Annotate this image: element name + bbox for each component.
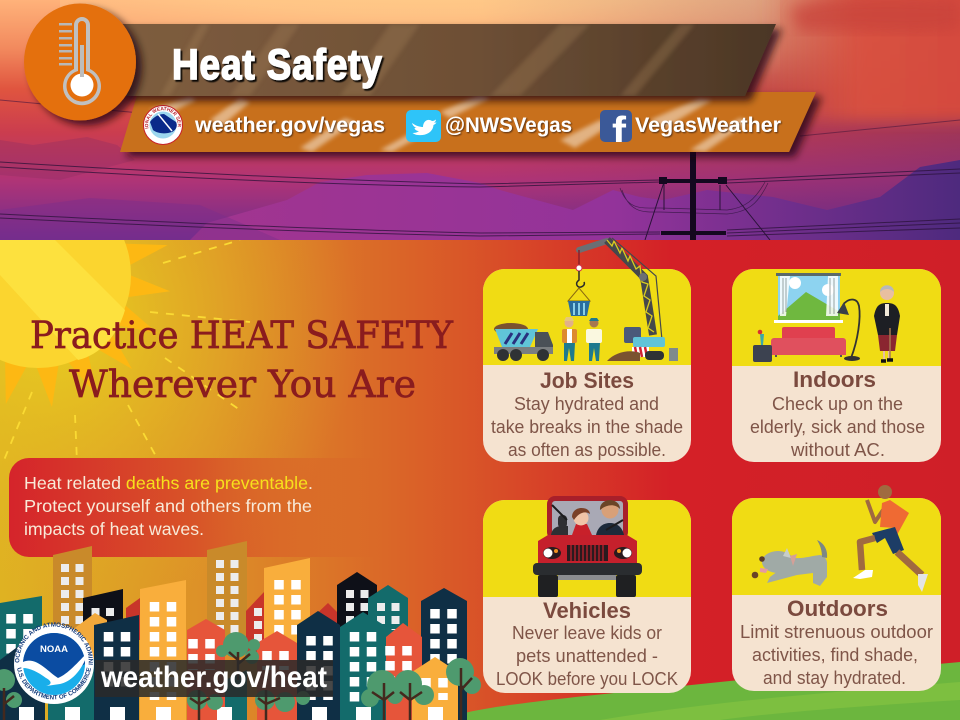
sun [0, 240, 250, 459]
text: Job Sites advice: take breaks in the shade [491, 417, 683, 437]
icon: Facebook [600, 110, 632, 142]
text: Indoors advice [750, 394, 925, 460]
mountains [0, 137, 960, 240]
text: Outdoors advice: and stay hydrated. [763, 668, 906, 688]
icon: NOAA logo: U.S. DEPARTMENT OF COMMERCE [17, 667, 91, 700]
callout: heat deaths are preventable: Protect yourself and others from the [24, 496, 312, 516]
power lines and pylon [0, 100, 960, 240]
panel: Job Sites [483, 238, 691, 462]
panel: lower orange background [0, 240, 960, 720]
panel: Indoors [732, 269, 941, 462]
callout: heat deaths are preventable: Heat related deaths are preventable. [24, 473, 313, 493]
callout: heat deaths are preventable [9, 458, 328, 557]
text: Outdoors advice: activities, find shade, [752, 645, 918, 665]
text: @NWSVegas: @NWSVegas [445, 114, 572, 137]
icon: thermometer in orange circle [24, 4, 136, 120]
banner: web address and social links [120, 91, 826, 163]
band: weather.gov/heat link: weather.gov/heat [100, 661, 327, 694]
text: Indoors advice: elderly, sick and those [750, 417, 925, 437]
panel: Vehicles [483, 496, 691, 693]
grass [440, 662, 960, 720]
heading: Practice HEAT SAFETY Wherever You Are: Practice HEAT SAFETY [30, 314, 454, 357]
heading: Vehicles: Vehicles [543, 598, 631, 623]
callout: heat deaths are preventable: impacts of heat waves. [24, 519, 204, 539]
heading: Indoors: Indoors [793, 367, 876, 392]
text: weather.gov/vegas: weather.gov/vegas [194, 114, 385, 137]
text: Indoors advice: without AC. [790, 440, 885, 460]
city skyline illustration [0, 541, 481, 720]
text: Vehicles advice [496, 623, 678, 689]
text: Outdoors advice [740, 622, 933, 688]
icon: NWS logo [143, 105, 183, 145]
icon: Facebook: f [612, 108, 627, 155]
heading: Job Sites: Job Sites [540, 368, 634, 393]
text: Job Sites advice: Stay hydrated and [514, 394, 659, 414]
text: Vehicles advice: LOOK before you LOCK [496, 669, 678, 689]
illustration: dog and runner [752, 485, 928, 592]
text: VegasWeather: VegasWeather [635, 114, 781, 137]
heading: Outdoors: Outdoors [787, 596, 888, 621]
text: Indoors advice: Check up on the [772, 394, 903, 414]
trees [0, 632, 481, 720]
text: Vehicles advice: Never leave kids or [512, 623, 662, 643]
title: Heat Safety [172, 41, 382, 89]
text: Job Sites advice: as often as possible. [508, 440, 666, 460]
text: Outdoors advice: Limit strenuous outdoor [740, 622, 933, 642]
text: Job Sites advice [491, 394, 683, 460]
banner: title bar [120, 24, 776, 96]
icon: Twitter [406, 110, 441, 142]
icon: NOAA logo: NOAA [40, 644, 68, 655]
text: Vehicles advice: pets unattended - [516, 646, 658, 666]
heading: Practice HEAT SAFETY Wherever You Are: Wherever You Are [69, 363, 416, 406]
illustration: window, sofa, lamp and elderly woman [753, 273, 900, 362]
illustration: crane, truck and workers [494, 238, 678, 361]
panel: Outdoors [732, 485, 941, 691]
panel: sunset header photo [0, 0, 960, 240]
heading: Practice HEAT SAFETY Wherever You Are [32, 320, 454, 398]
icon: NOAA logo [14, 622, 94, 704]
illustration: jeep with driver and child [533, 496, 642, 597]
